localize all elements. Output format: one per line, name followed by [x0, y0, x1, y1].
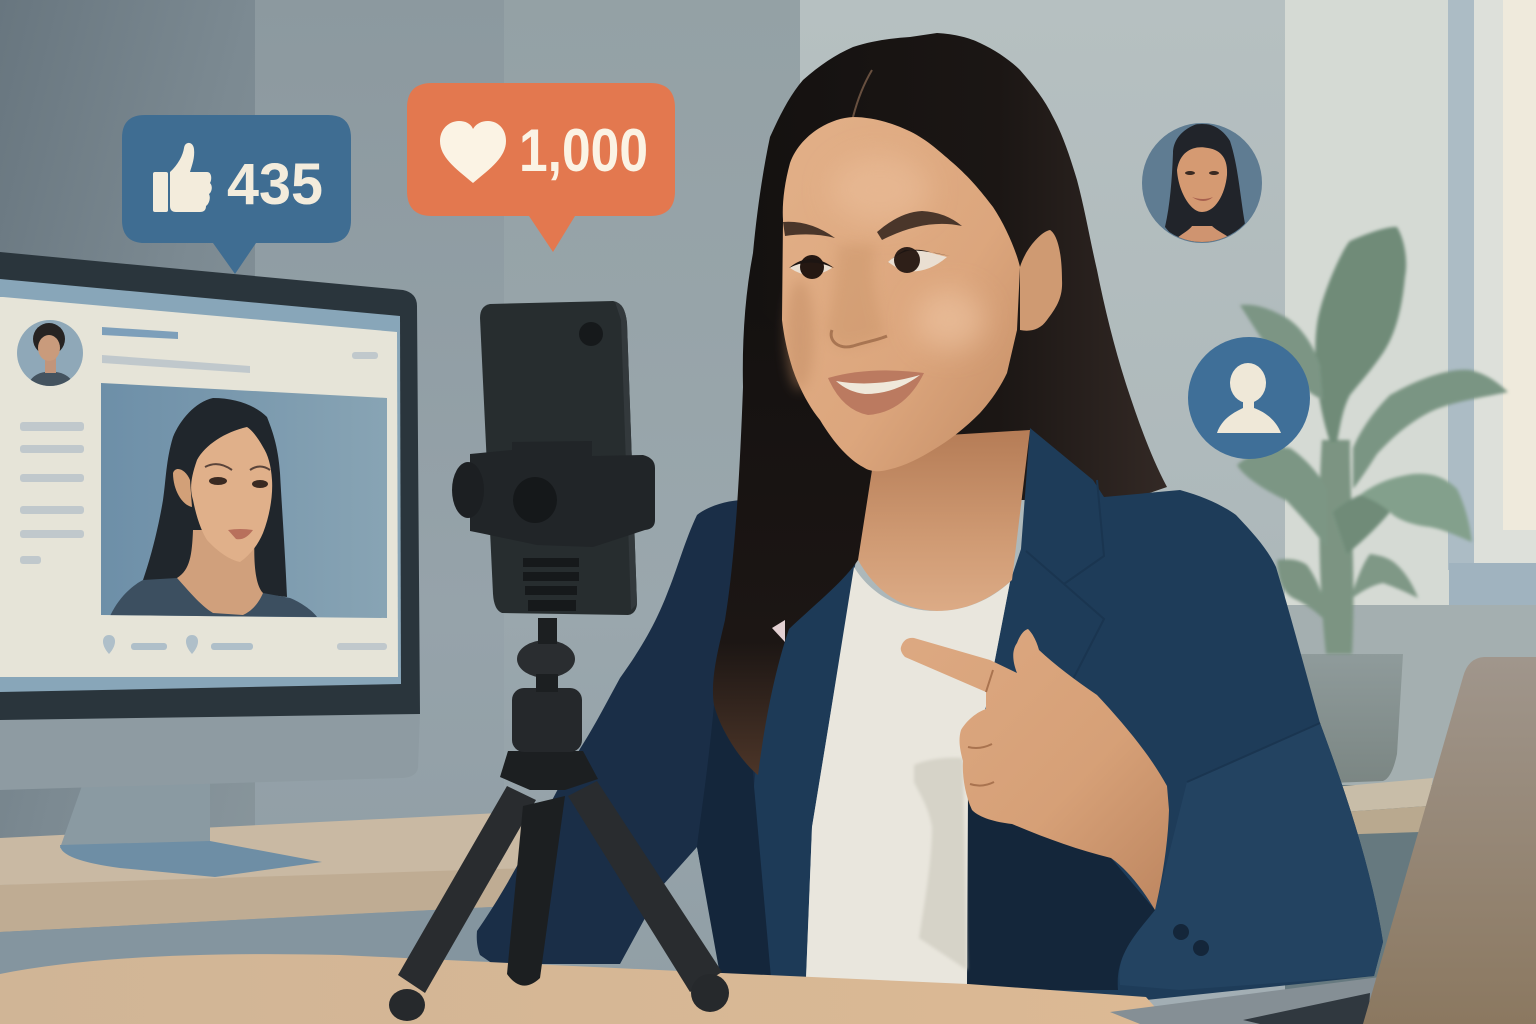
avatar bubble: user icon: [1188, 337, 1310, 459]
left sleeve: [477, 500, 800, 985]
lapel pin: [772, 620, 785, 642]
shirt: [806, 567, 1010, 985]
lapel lines: [1026, 480, 1320, 782]
eyebrows: [783, 222, 835, 238]
screen: woman photo: [101, 383, 387, 618]
plant in pot: [1237, 227, 1508, 783]
blazer dark body under hand: [967, 792, 1155, 990]
sleeve forearm shade: [1119, 723, 1383, 990]
mouth: [828, 370, 924, 415]
face shading: [786, 155, 985, 390]
screen: post footer icons: [103, 635, 387, 654]
phone on tripod: [389, 301, 729, 1021]
left lapel: [754, 560, 856, 980]
blazer right torso: [967, 428, 1383, 1000]
heart badge: 1,000: [407, 83, 675, 252]
tripod legs: [389, 781, 729, 1021]
spring neck: [523, 558, 579, 611]
screen: placeholder text lines: [20, 327, 378, 564]
pointing hand: [901, 629, 1169, 910]
hair back: [743, 33, 1167, 510]
cuff buttons: [1173, 924, 1209, 956]
icon: thumbs up: [153, 143, 212, 212]
face: [782, 117, 1020, 471]
like badge: 435: [122, 115, 351, 274]
monitor: [0, 252, 420, 790]
laptop: [1110, 657, 1536, 1024]
avatar bubble: woman: [1142, 123, 1262, 245]
screen: profile avatar: [17, 320, 83, 390]
hair left strand: [713, 300, 872, 775]
tripod head and ball joint: [500, 751, 598, 790]
back desk left: [0, 812, 530, 975]
monitor stand: [60, 775, 322, 877]
phone body: [480, 301, 637, 615]
shirt shadow: [914, 758, 967, 970]
neck: [858, 430, 1030, 611]
woman presenter: [477, 33, 1383, 1000]
heart badge: 1,000: 1,000: [519, 117, 648, 184]
like badge: 435: 435: [227, 152, 323, 217]
icon: heart: [440, 121, 506, 183]
nose: [831, 330, 887, 347]
eyes: [790, 260, 832, 275]
left dark panel: [697, 640, 775, 980]
ear: [1020, 230, 1062, 331]
back desk right: [1300, 778, 1433, 836]
phone clamp: [470, 441, 655, 547]
hair part line: [853, 70, 872, 117]
front desk: [0, 954, 1170, 1024]
